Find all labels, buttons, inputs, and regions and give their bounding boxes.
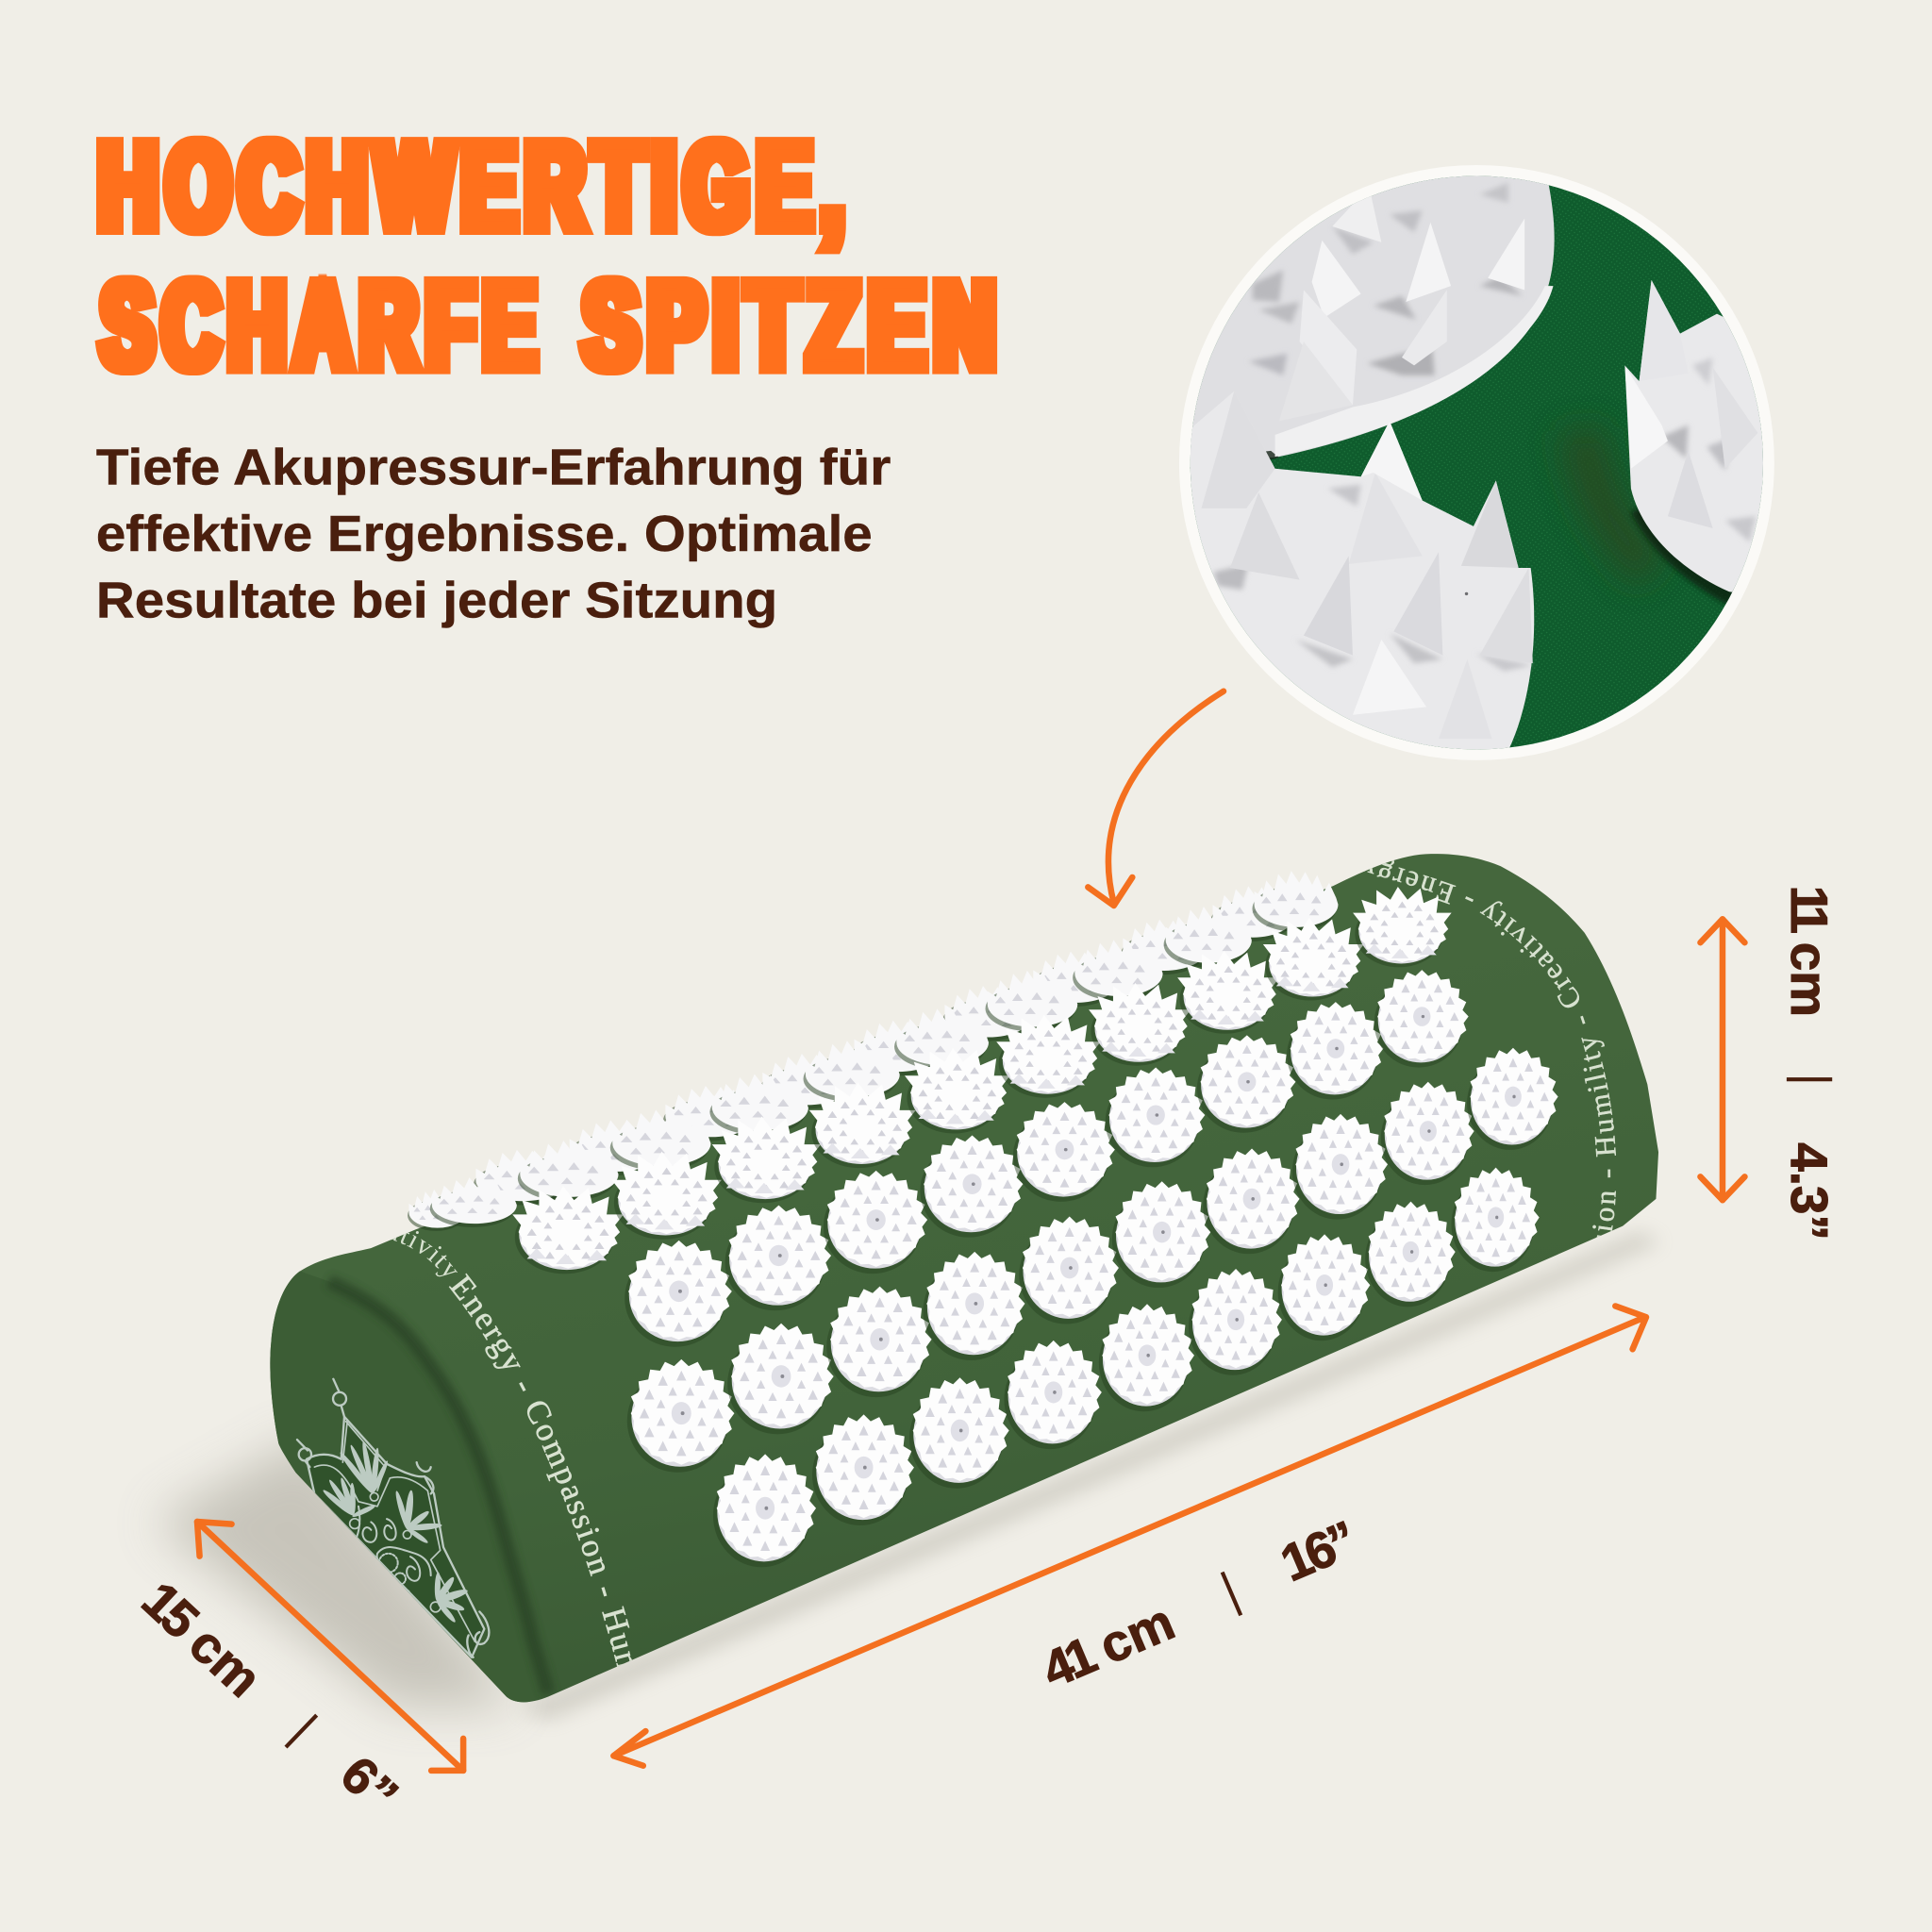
spike discs: rear row — [430, 871, 1338, 1227]
subtitle text block — [96, 440, 891, 628]
close-up circle of spikes — [1179, 165, 1774, 760]
arrow: height — [1700, 919, 1744, 1200]
title: SCHARFE — [101, 257, 545, 395]
label: width 15 cm / 6 in — [131, 1571, 409, 1824]
spike discs: front row — [713, 1168, 1540, 1567]
arrow: width — [197, 1522, 463, 1771]
title — [98, 116, 1005, 395]
piece: right spike disc — [1624, 280, 1763, 592]
piece: lower spike disc — [1181, 391, 1534, 751]
spike discs: back fill row — [408, 886, 1293, 1231]
band text right: sion - Humility - Creativity - Energy — [1364, 860, 1616, 1238]
end face of pillow — [270, 1272, 530, 1702]
label: length 41 cm / 16 in: 16” — [1273, 1509, 1365, 1592]
label: length 41 cm / 16 in — [1034, 1509, 1365, 1699]
arrow: close-up to pillow — [1088, 691, 1224, 906]
ground shadow — [154, 1232, 1661, 1720]
arrow: length — [613, 1306, 1646, 1766]
end seam — [329, 1281, 548, 1693]
pillow — [270, 854, 1658, 1702]
label: length 41 cm / 16 in: 41 cm — [1034, 1592, 1183, 1699]
title: HOCHWERTIGE, — [98, 116, 853, 256]
label: height 11 cm / 4.3 in: 4.3” — [1780, 1142, 1839, 1241]
label: height 11 cm / 4.3 in — [1780, 886, 1839, 1241]
spike discs: second row — [512, 887, 1452, 1274]
subtitle text block: Tiefe Akupressur-Erfahrung für — [96, 440, 891, 495]
subtitle text block: effektive Ergebnisse. Optimale — [96, 507, 873, 562]
label: height 11 cm / 4.3 in: 11 cm — [1780, 886, 1839, 1017]
subtitle text block: Resultate bei jeder Sitzung — [96, 573, 777, 628]
spike discs: third row — [625, 970, 1469, 1347]
pillow body — [270, 854, 1658, 1702]
title: SPITZEN — [583, 255, 1005, 394]
label: width 15 cm / 6 in: 15 cm — [131, 1571, 273, 1708]
label: width 15 cm / 6 in: 6” — [329, 1744, 409, 1824]
spike discs: fourth row — [627, 1048, 1558, 1473]
mandala print — [297, 1379, 489, 1657]
piece: upper spike disc — [1176, 167, 1555, 469]
